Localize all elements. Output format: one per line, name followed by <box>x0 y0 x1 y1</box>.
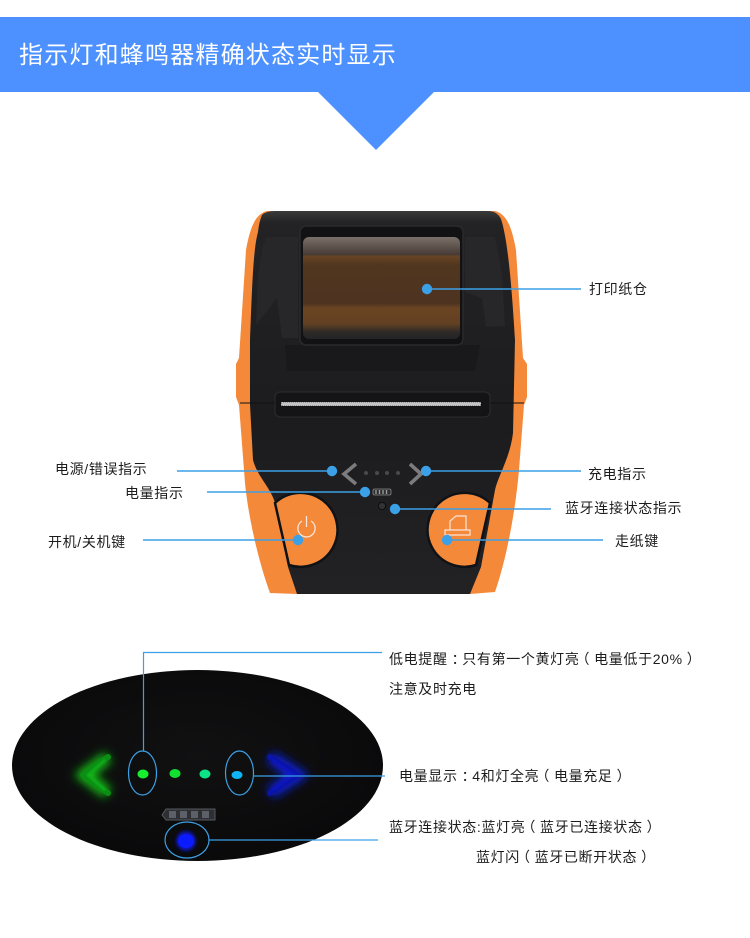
blue chevron <box>270 757 298 793</box>
paper icon <box>445 516 470 535</box>
printer illustration <box>236 211 527 594</box>
bluetooth LED <box>176 831 196 851</box>
indicator dots <box>364 471 400 475</box>
callout: paper compartment <box>422 281 648 297</box>
lid side shading <box>256 237 505 338</box>
callout: charging indicator: 充电指示 <box>588 466 647 482</box>
callout: power key: 开机/关机键 <box>48 534 126 550</box>
note: bluetooth status <box>389 819 661 865</box>
note: battery display: 电量显示 ：4和灯全亮（ 电量充足 ） <box>399 768 631 784</box>
note: low battery: 低电提醒 ：只有第一个黄灯亮（ 电量低于20% ） <box>389 651 701 667</box>
bluetooth LED <box>378 502 386 510</box>
note: bluetooth status: 蓝灯闪（ 蓝牙已断开状态 ） <box>476 849 656 865</box>
callout: charging indicator <box>421 466 647 482</box>
callout: battery indicator <box>125 485 370 501</box>
callout: power/error indicator <box>55 461 337 477</box>
note: bluetooth status: 蓝牙连接状态:蓝灯亮（ 蓝牙已连接状态 ） <box>389 819 661 835</box>
note: low battery <box>389 651 701 697</box>
lower lid shadow <box>285 345 480 371</box>
right chevron <box>410 464 421 484</box>
callout: battery indicator: 电量指示 <box>125 485 184 501</box>
paper slot <box>240 392 524 417</box>
LED 3 <box>200 770 210 778</box>
header banner <box>0 17 750 150</box>
paper compartment recess <box>300 226 463 345</box>
LED 4 <box>232 771 242 779</box>
title: 指示灯和蜂鸣器精确状态实时显示 <box>19 42 397 69</box>
green chevron <box>84 757 108 793</box>
orange shell <box>236 211 527 594</box>
battery icon <box>373 489 391 495</box>
LED 2 <box>170 769 180 778</box>
battery symbol <box>162 809 215 820</box>
highlight: low battery LED <box>128 652 382 795</box>
callout: power/error indicator: 电源/错误指示 <box>55 461 147 477</box>
indicator close-up panel <box>12 670 383 861</box>
note: low battery: 注意及时充电 <box>389 681 477 697</box>
LED 1 <box>138 770 148 778</box>
callout: feed key: 走纸键 <box>615 533 659 549</box>
power icon <box>298 516 315 537</box>
paper compartment window <box>303 237 460 339</box>
callout: bluetooth status <box>390 500 682 516</box>
printer body <box>250 211 515 594</box>
power button <box>275 493 337 567</box>
callout: feed key <box>442 533 659 549</box>
callout: power key <box>48 534 303 550</box>
callout: bluetooth status: 蓝牙连接状态指示 <box>565 500 682 516</box>
feed button <box>428 493 490 567</box>
left chevron <box>344 464 356 484</box>
highlight: full battery LED <box>226 751 385 795</box>
highlight: bluetooth LED <box>165 822 378 858</box>
callout: paper compartment: 打印纸仓 <box>589 281 648 297</box>
